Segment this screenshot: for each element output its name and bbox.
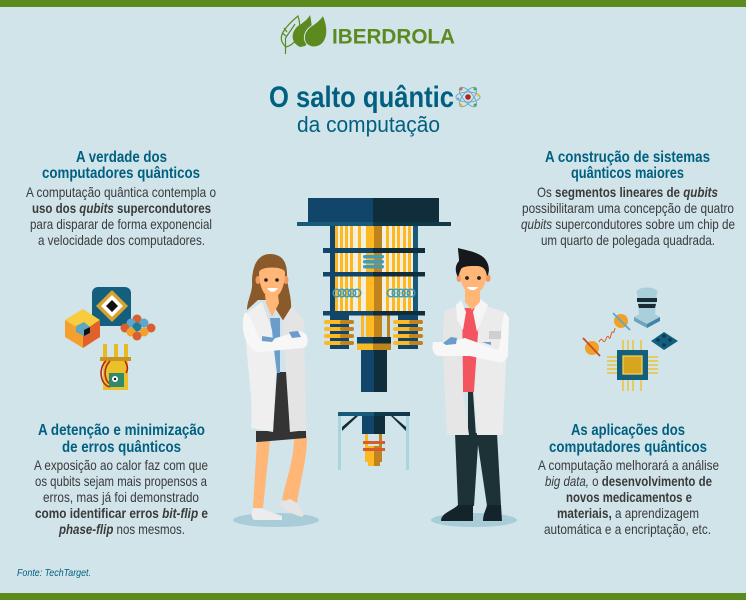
panel: a verdade dos computadores quânticos: A computação quântica contempla o xyxy=(26,184,216,200)
top bar xyxy=(0,0,746,7)
panel: a detenção e minimização de erros quânticos: como identificar erros bit-flip e xyxy=(35,505,208,521)
panel: a construção de sistemas quânticos maiores xyxy=(521,149,735,248)
coat xyxy=(443,306,469,435)
trousers xyxy=(455,433,501,506)
panel: a detenção e minimização de erros quânticos: A detenção e minimização xyxy=(38,422,205,439)
panel: a verdade dos computadores quânticos xyxy=(26,149,216,248)
panel: as aplicações dos computadores quânticos: materiais, a aprendizagem xyxy=(557,505,699,521)
panel: a verdade dos computadores quânticos: para disparar de forma exponencial xyxy=(30,216,212,232)
panel: a construção de sistemas quânticos maiores: quânticos maiores xyxy=(571,165,684,182)
panel: a verdade dos computadores quânticos: A verdade dos xyxy=(76,149,167,166)
blue top xyxy=(270,318,280,373)
panel: a detenção e minimização de erros quânticos: os qubits sejam mais propensos a xyxy=(35,473,207,489)
shoes xyxy=(441,505,473,521)
panel: a detenção e minimização de erros quânticos: phase-flip nos mesmos. xyxy=(58,521,185,537)
neck xyxy=(465,290,480,310)
scientist: man xyxy=(431,248,517,527)
source note: Fonte: TechTarget. xyxy=(17,568,91,579)
panel: a verdade dos computadores quânticos: a velocidade dos computadores. xyxy=(38,232,205,248)
panel: a construção de sistemas quânticos maiores: Os segmentos lineares de qubits xyxy=(537,184,718,200)
face xyxy=(256,276,260,284)
shirt xyxy=(462,308,480,392)
neck xyxy=(265,295,279,317)
logo: Iberdrola: IBERDROLA xyxy=(332,26,455,48)
bottom bar xyxy=(0,593,746,600)
panel: a detenção e minimização de erros quânticos: de erros quânticos xyxy=(62,439,181,456)
scientist: woman xyxy=(233,254,319,527)
face xyxy=(456,274,462,282)
coat xyxy=(245,302,276,432)
icon: atom xyxy=(456,85,480,109)
skirt xyxy=(256,431,306,442)
panel: a verdade dos computadores quânticos: computadores quânticos xyxy=(42,165,200,182)
icons: right cluster xyxy=(583,288,678,391)
panel: a verdade dos computadores quânticos: uso dos qubits supercondutores xyxy=(32,200,211,216)
panel: a detenção e minimização de erros quânticos: erros, mas já foi demonstrado xyxy=(43,489,199,505)
panel: a detenção e minimização de erros quânticos: A exposição ao calor faz com que xyxy=(34,457,208,473)
title xyxy=(269,81,454,137)
panel: as aplicações dos computadores quânticos: computadores quânticos xyxy=(549,439,707,456)
crossed arms xyxy=(243,312,308,352)
panel: a construção de sistemas quânticos maiores: A construção de sistemas xyxy=(545,149,710,166)
title: da computação xyxy=(297,112,440,137)
logo: Iberdrola xyxy=(281,15,455,54)
icons: left cluster xyxy=(65,287,156,390)
hair xyxy=(456,248,489,277)
hair xyxy=(247,254,291,325)
panel: as aplicações dos computadores quânticos: automática e a encriptação, etc. xyxy=(544,521,711,537)
crossed arms xyxy=(432,312,509,362)
panel: as aplicações dos computadores quânticos: As aplicações dos xyxy=(571,422,685,439)
panel: as aplicações dos computadores quânticos: novos medicamentos e xyxy=(566,489,692,505)
legs xyxy=(253,440,270,508)
panel: a construção de sistemas quânticos maiores: um quarto de polegada quadrada. xyxy=(541,232,715,248)
panel: as aplicações dos computadores quânticos: big data, o desenvolvimento de xyxy=(545,473,712,489)
panel: as aplicações dos computadores quânticos xyxy=(538,422,719,537)
quantum computer xyxy=(297,198,451,470)
title: O salto quântic xyxy=(269,81,454,114)
panel: a detenção e minimização de erros quânticos xyxy=(34,422,208,537)
